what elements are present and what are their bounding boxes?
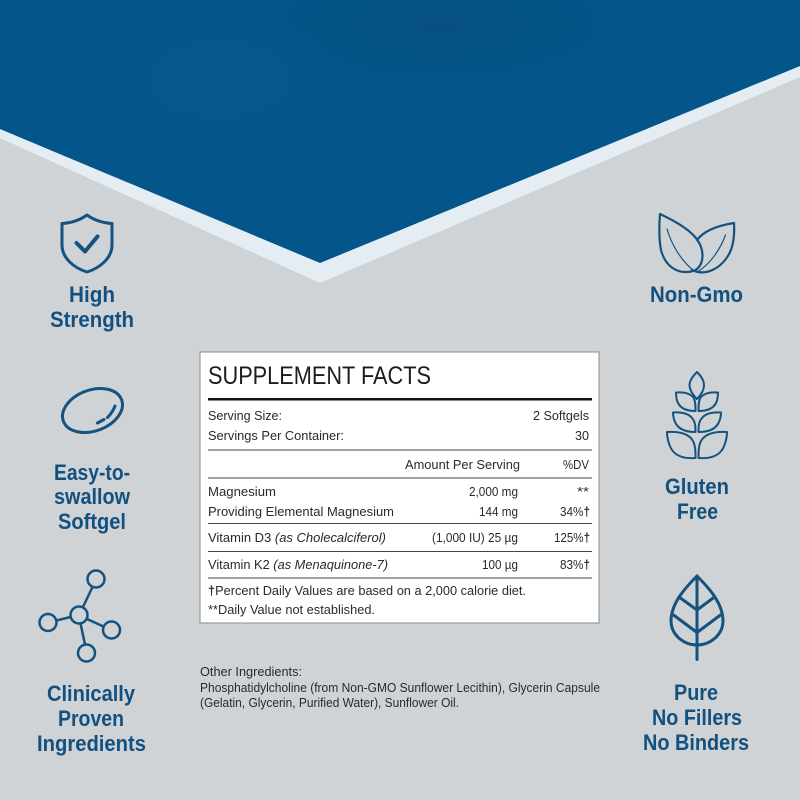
label xyxy=(665,474,729,524)
label: Easy-to- xyxy=(54,460,130,485)
feature: easy to swallow softgel xyxy=(54,381,131,534)
row: magnesium: ** xyxy=(577,484,589,499)
row: magnesium: Magnesium xyxy=(208,484,276,499)
row: magnesium: 144 mg xyxy=(479,504,518,519)
other ingredients: Phosphatidylcholine (from Non-GMO Sunflower Lecithin), Glycerin Capsule xyxy=(200,680,600,695)
row: magnesium: 2,000 mg xyxy=(469,484,518,499)
feature: non-gmo xyxy=(650,214,743,307)
row: vitamin k2: 100 µg xyxy=(482,557,518,572)
row: magnesium: 34%† xyxy=(560,504,590,519)
icon: softgel xyxy=(56,381,129,440)
feature: clinically proven ingredients xyxy=(37,570,146,756)
label: Pure xyxy=(674,680,718,705)
label: No Fillers xyxy=(652,705,742,730)
feature: gluten free xyxy=(665,372,729,524)
other ingredients: (Gelatin, Glycerin, Purified Water), Sunflower Oil. xyxy=(200,695,459,710)
serving information xyxy=(208,408,589,443)
row: vitamin k2 xyxy=(208,557,590,572)
feature: pure no fillers no binders xyxy=(643,576,749,755)
icon: leaf xyxy=(671,576,723,660)
row: magnesium xyxy=(208,484,590,519)
row: vitamin d3: (1,000 IU) 25 µg xyxy=(432,530,518,545)
icon: shield with check xyxy=(62,215,112,272)
other ingredients: Other Ingredients: xyxy=(200,664,302,679)
panel background xyxy=(200,352,599,623)
label: High xyxy=(69,282,115,307)
feature: high strength xyxy=(50,215,134,332)
label: Gluten xyxy=(665,474,729,499)
label: Proven xyxy=(58,706,124,731)
label xyxy=(54,460,131,534)
serving information: 2 Softgels xyxy=(533,408,589,423)
heading: SUPPLEMENT FACTS xyxy=(208,362,431,390)
label: Ingredients xyxy=(37,731,146,756)
label xyxy=(643,680,749,755)
light chevron band xyxy=(0,66,800,283)
row: vitamin k2: Vitamin K2 (as Menaquinone-7) xyxy=(208,557,388,572)
table header: %DV xyxy=(563,457,589,472)
serving information: 30 xyxy=(575,428,589,443)
label: swallow xyxy=(54,484,131,509)
row: vitamin d3: 125%† xyxy=(554,530,590,545)
table header: Amount Per Serving xyxy=(405,457,520,472)
row: magnesium: Providing Elemental Magnesium xyxy=(208,504,394,519)
footnotes: †Percent Daily Values are based on a 2,000 calorie diet. xyxy=(208,583,526,598)
label: Softgel xyxy=(58,509,126,534)
label: Strength xyxy=(50,307,134,332)
row: vitamin d3: Vitamin D3 (as Cholecalciferol) xyxy=(208,530,386,545)
icon: molecule xyxy=(40,570,120,662)
row: vitamin d3 xyxy=(208,530,590,545)
serving information: Serving Size: xyxy=(208,408,282,423)
panel: supplement facts xyxy=(200,352,599,623)
label: Non-Gmo xyxy=(650,282,743,307)
other ingredients xyxy=(200,664,600,710)
icon: two leaves xyxy=(659,214,734,272)
label: Clinically xyxy=(47,681,136,706)
label xyxy=(50,282,134,332)
footnotes: **Daily Value not established. xyxy=(208,602,375,617)
footnotes xyxy=(208,583,526,617)
row: vitamin k2: 83%† xyxy=(560,557,590,572)
icon: wheat xyxy=(667,372,727,458)
label xyxy=(37,681,146,756)
label: Free xyxy=(677,499,718,524)
serving information: Servings Per Container: xyxy=(208,428,344,443)
header banner xyxy=(0,0,800,283)
blue chevron xyxy=(0,0,800,263)
label: No Binders xyxy=(643,730,749,755)
table header xyxy=(405,457,589,472)
